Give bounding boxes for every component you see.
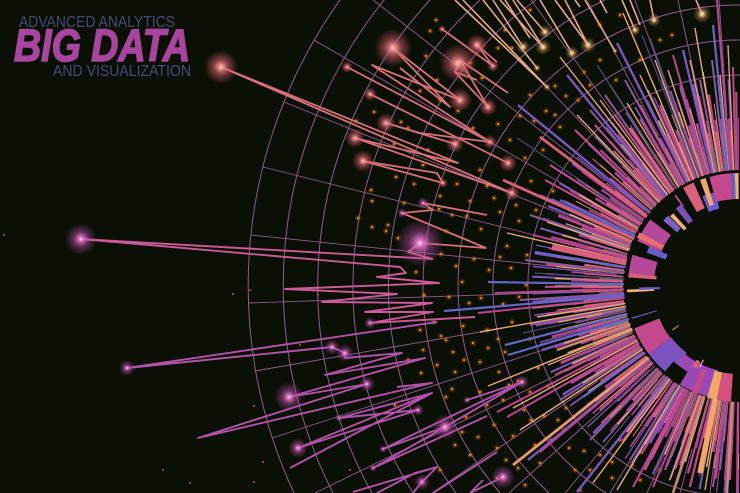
subtitle top: ADVANCED ANALYTICS [19,14,175,31]
data lines: top peach [455,0,702,87]
data lines: middle pink zigzag [80,239,475,323]
ring segments [632,178,739,394]
data lines: upper coral [221,29,512,259]
polar grid [248,0,740,493]
title block [14,14,191,80]
data lines: lower magenta zigzag [127,322,522,493]
main title: BIG DATA [14,20,190,71]
subtitle bottom: AND VISUALIZATION [53,63,191,80]
radial bar fan [574,121,739,451]
central ring chart [624,170,740,402]
ring backing disk [624,170,740,402]
long radial bars [444,0,739,493]
